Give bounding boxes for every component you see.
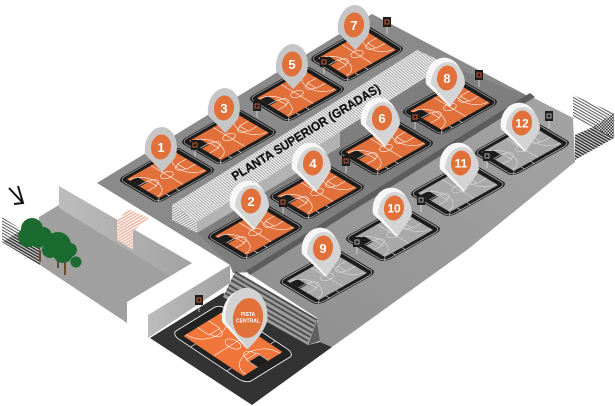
pin 11: 11 xyxy=(455,156,468,170)
court 4 xyxy=(267,163,367,221)
court 10 xyxy=(343,205,443,263)
wall below white walkway xyxy=(148,265,230,338)
grandstand hatched top xyxy=(172,50,447,222)
backboards xyxy=(191,17,553,312)
court 1 xyxy=(117,146,217,204)
court 3 xyxy=(179,108,279,166)
pin 6: 6 xyxy=(378,111,386,126)
entrance arrow xyxy=(9,186,23,204)
entrance plaza xyxy=(39,186,192,323)
pin 6 xyxy=(361,98,400,147)
pin 5 xyxy=(273,42,310,91)
pin 4: 4 xyxy=(309,156,317,171)
court 11 xyxy=(408,160,508,218)
salmon hatched crossing xyxy=(117,209,149,231)
pin 1: 1 xyxy=(157,140,165,155)
court 7 xyxy=(308,25,406,83)
pin 12: 12 xyxy=(515,116,529,130)
pin 1 xyxy=(142,125,179,174)
pin 3 xyxy=(205,86,242,135)
dark base of central court xyxy=(150,293,332,405)
level divider strip xyxy=(246,93,535,275)
pin 8: 8 xyxy=(443,71,451,86)
stairs xyxy=(223,272,320,345)
pin 8 xyxy=(426,58,465,107)
left hatched ground patches xyxy=(2,217,40,265)
pin 12 xyxy=(501,103,540,152)
grandstand hatched front xyxy=(172,205,197,233)
lower level platform xyxy=(248,96,575,347)
salmon hatched wall section xyxy=(117,221,133,250)
grandstand label: PLANTA SUPERIOR (GRADAS) xyxy=(229,81,383,184)
court 8 xyxy=(400,78,500,136)
central pin xyxy=(222,288,268,349)
court 5 xyxy=(247,65,347,123)
grandstand block xyxy=(172,50,447,233)
pin 10: 10 xyxy=(387,202,401,216)
plaza floor xyxy=(39,205,192,323)
pin 11 xyxy=(440,143,479,192)
grandstand side xyxy=(197,128,340,233)
pin 10 xyxy=(373,188,412,237)
right hatched ground patches xyxy=(573,95,614,160)
pin 4 xyxy=(292,143,331,192)
pin 3: 3 xyxy=(220,101,228,116)
pin 7: 7 xyxy=(350,18,358,33)
court 2 xyxy=(205,203,305,261)
central pin: PISTA xyxy=(241,312,256,318)
upper level platform xyxy=(97,14,530,273)
pin 9 xyxy=(302,228,341,277)
central court xyxy=(171,304,295,384)
pin 9: 9 xyxy=(319,241,327,256)
middle strip floor xyxy=(197,62,530,273)
central pin: CENTRAL xyxy=(236,318,260,324)
court 6 xyxy=(336,119,436,177)
pin 5: 5 xyxy=(288,57,296,72)
pin 2: 2 xyxy=(247,194,255,209)
pin 7 xyxy=(335,3,372,52)
pin 2 xyxy=(230,181,269,230)
court 9 xyxy=(277,248,377,306)
plaza back wall xyxy=(59,186,192,276)
trees xyxy=(18,218,82,275)
court 12 xyxy=(472,119,572,177)
